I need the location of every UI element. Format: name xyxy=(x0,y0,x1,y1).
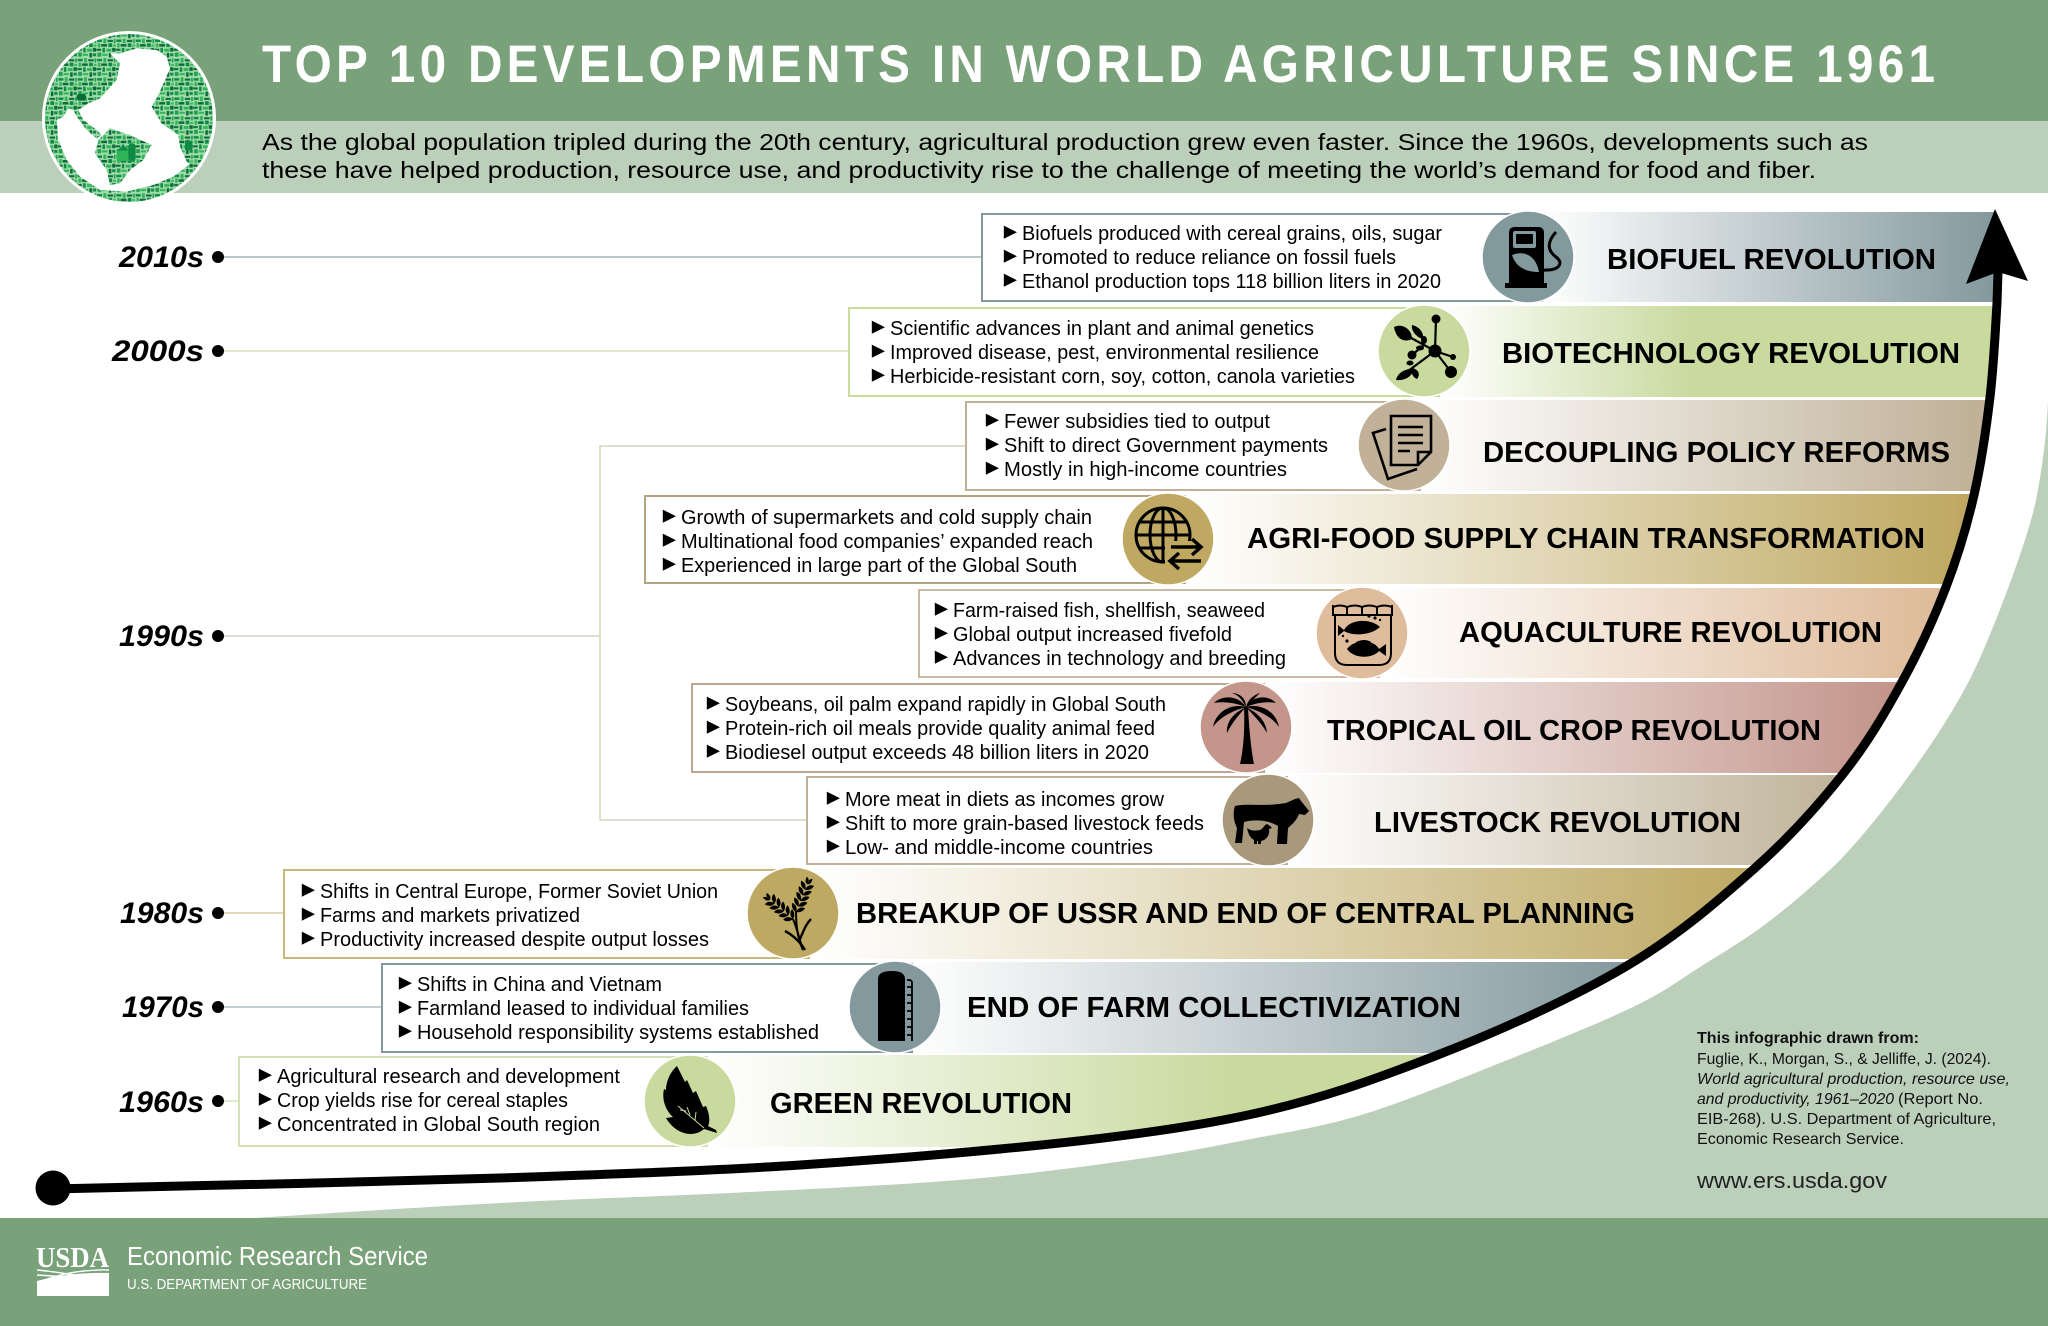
icon: fish tank xyxy=(1316,587,1408,679)
title: TOP 10 DEVELOPMENTS IN WORLD AGRICULTURE SINCE 1961 xyxy=(262,34,1935,94)
timeline connector lines xyxy=(224,257,981,1101)
band: green revolution: ► xyxy=(254,1109,276,1134)
intro text xyxy=(262,129,1868,183)
band: livestock revolution: More meat in diets as incomes grow xyxy=(845,789,1165,811)
USDA logo: USDA xyxy=(36,1242,109,1274)
icon: globe made of farm icons xyxy=(42,31,216,205)
band: decoupling policy reforms: Mostly in high-income countries xyxy=(1004,459,1287,481)
source citation: Economic Research Service. xyxy=(1697,1131,1904,1148)
band: livestock revolution xyxy=(807,775,1908,865)
band: biotechnology revolution: BIOTECHNOLOGY REVOLUTION xyxy=(1502,338,1960,370)
band: end of farm collectivization: ► xyxy=(394,993,416,1018)
icon: biotechnology network xyxy=(1378,305,1470,397)
band: aquaculture revolution xyxy=(919,588,1982,678)
band: aquaculture revolution: Advances in technology and breeding xyxy=(953,648,1286,670)
year label 1970s: 1970s xyxy=(122,991,204,1024)
band: decoupling policy reforms: ► xyxy=(982,454,1003,479)
band: biofuel revolution: Biofuels produced with cereal grains, oils, sugar xyxy=(1022,223,1442,245)
band: end of farm collectivization: ► xyxy=(394,1017,416,1042)
band: breakup of USSR: BREAKUP OF USSR AND END OF CENTRAL PLANNING xyxy=(856,898,1635,930)
source citation: Fuglie, K., Morgan, S., & Jelliffe, J. (2024). xyxy=(1697,1051,1991,1068)
growth arrow curve xyxy=(36,209,2028,1206)
footer agency name: Economic Research Service xyxy=(127,1243,428,1271)
band: decoupling policy reforms: Fewer subsidies tied to output xyxy=(1004,411,1270,433)
band: livestock revolution: LIVESTOCK REVOLUTION xyxy=(1374,807,1741,839)
band: green revolution: Crop yields rise for cereal staples xyxy=(277,1090,568,1112)
header title bar xyxy=(0,0,2048,121)
band: livestock revolution: Low- and middle-income countries xyxy=(845,837,1153,859)
band: biotechnology revolution: Herbicide-resistant corn, soy, cotton, canola varieties xyxy=(890,366,1355,388)
band: green revolution: Agricultural research and development xyxy=(277,1066,620,1088)
icon: cow and chicken xyxy=(1222,774,1314,866)
footer bar xyxy=(0,1218,2048,1326)
band: tropical oil crop revolution: Biodiesel output exceeds 48 billion liters in 2020 xyxy=(725,742,1149,764)
band: tropical oil crop revolution: ► xyxy=(702,737,724,762)
band: breakup of USSR xyxy=(284,868,1793,959)
icon: silo xyxy=(849,961,941,1053)
band: end of farm collectivization: Farmland leased to individual families xyxy=(417,998,749,1020)
source citation: and productivity, 1961–2020 xyxy=(1697,1091,1894,1108)
band: green revolution: ► xyxy=(254,1085,276,1110)
band: breakup of USSR: ► xyxy=(298,924,319,949)
header intro band xyxy=(0,121,2048,193)
band: agri-food supply chain transformation xyxy=(645,494,2008,584)
band: breakup of USSR: ► xyxy=(298,900,319,925)
band: decoupling policy reforms: DECOUPLING POLICY REFORMS xyxy=(1483,437,1950,469)
band: green revolution: GREEN REVOLUTION xyxy=(770,1088,1072,1120)
source citation: World agricultural production, resource use, xyxy=(1697,1071,2010,1088)
source citation: (Report No. xyxy=(1898,1091,1983,1108)
band: agri-food supply chain transformation: ► xyxy=(658,526,680,551)
band: agri-food supply chain transformation: AGRI-FOOD SUPPLY CHAIN TRANSFORMATION xyxy=(1247,523,1925,555)
year label 1980s: 1980s xyxy=(120,897,204,930)
band: agri-food supply chain transformation: Growth of supermarkets and cold supply chain xyxy=(681,507,1092,529)
band: biofuel revolution: BIOFUEL REVOLUTION xyxy=(1607,244,1936,276)
footer department name: U.S. DEPARTMENT OF AGRICULTURE xyxy=(127,1276,367,1293)
band: agri-food supply chain transformation: Multinational food companies’ expanded reach xyxy=(681,531,1093,553)
band: biotechnology revolution: ► xyxy=(868,313,889,338)
website: www.ers.usda.gov xyxy=(1696,1168,1887,1193)
band: biotechnology revolution: ► xyxy=(868,361,889,386)
band: biofuel revolution: Ethanol production tops 118 billion liters in 2020 xyxy=(1022,271,1441,293)
band: decoupling policy reforms: Shift to direct Government payments xyxy=(1004,435,1328,457)
band: tropical oil crop revolution: Protein-rich oil meals provide quality animal feed xyxy=(725,718,1155,740)
band: agri-food supply chain transformation: Experienced in large part of the Global South xyxy=(681,555,1077,577)
band: breakup of USSR: Shifts in Central Europe, Former Soviet Union xyxy=(320,881,718,903)
icon: wheat xyxy=(747,867,839,959)
band: biofuel revolution: ► xyxy=(1000,266,1021,291)
icon: palm tree xyxy=(1200,681,1292,773)
band: decoupling policy reforms: ► xyxy=(982,406,1003,431)
USDA logo xyxy=(36,1242,109,1296)
band: green revolution: ► xyxy=(254,1061,276,1086)
band: biotechnology revolution xyxy=(849,306,2004,397)
band: tropical oil crop revolution xyxy=(692,682,1946,773)
band: end of farm collectivization: Shifts in China and Vietnam xyxy=(417,974,662,996)
band: livestock revolution: ► xyxy=(822,808,844,833)
intro text: As the global population tripled during the 20th century, agricultural production grew even faster. Since the 1960s, developments such as xyxy=(262,129,1868,155)
band: tropical oil crop revolution: Soybeans, oil palm expand rapidly in Global South xyxy=(725,694,1166,716)
year label 1990s: 1990s xyxy=(119,620,204,653)
source citation: This infographic drawn from: xyxy=(1697,1030,1919,1047)
band: tropical oil crop revolution: TROPICAL OIL CROP REVOLUTION xyxy=(1327,715,1821,747)
band: green revolution xyxy=(239,1055,1490,1147)
year label 2000s: 2000s xyxy=(111,335,204,368)
icon: leaf xyxy=(644,1055,736,1147)
year label 1960s: 1960s xyxy=(119,1086,204,1119)
band: aquaculture revolution: AQUACULTURE REVOLUTION xyxy=(1459,617,1882,649)
band: tropical oil crop revolution: ► xyxy=(702,713,724,738)
band: agri-food supply chain transformation: ► xyxy=(658,550,680,575)
year label 2010s: 2010s xyxy=(118,241,204,274)
band: decoupling policy reforms: ► xyxy=(982,430,1003,455)
band: aquaculture revolution: ► xyxy=(930,643,952,668)
band: biotechnology revolution: Scientific advances in plant and animal genetics xyxy=(890,318,1314,340)
band: end of farm collectivization xyxy=(382,962,1695,1053)
icon: policy documents xyxy=(1358,399,1450,491)
band: decoupling policy reforms xyxy=(966,400,2004,491)
band: biofuel revolution: ► xyxy=(1000,242,1021,267)
band: biotechnology revolution: Improved disease, pest, environmental resilience xyxy=(890,342,1319,364)
band: biofuel revolution xyxy=(982,212,1994,302)
intro text: these have helped production, resource use, and productivity rise to the challenge of meeting the world’s demand for food and fiber. xyxy=(262,157,1816,183)
band: tropical oil crop revolution: ► xyxy=(702,689,724,714)
source citation: EIB-268). U.S. Department of Agriculture, xyxy=(1697,1111,1996,1128)
band: end of farm collectivization: ► xyxy=(394,969,416,994)
white area under the growth curve xyxy=(52,272,2048,1218)
band: aquaculture revolution: Farm-raised fish, shellfish, seaweed xyxy=(953,600,1265,622)
band: end of farm collectivization: END OF FARM COLLECTIVIZATION xyxy=(967,992,1461,1024)
icon: fuel pump xyxy=(1482,211,1574,303)
band: biofuel revolution: Promoted to reduce reliance on fossil fuels xyxy=(1022,247,1396,269)
band: aquaculture revolution: Global output increased fivefold xyxy=(953,624,1232,646)
band: breakup of USSR: Farms and markets privatized xyxy=(320,905,580,927)
band: livestock revolution: ► xyxy=(822,832,844,857)
band: livestock revolution: Shift to more grain-based livestock feeds xyxy=(845,813,1204,835)
light green area right of the curve xyxy=(240,400,2048,1219)
band: aquaculture revolution: ► xyxy=(930,619,952,644)
band: breakup of USSR: ► xyxy=(298,876,319,901)
band: biofuel revolution: ► xyxy=(1000,218,1021,243)
band: agri-food supply chain transformation: ► xyxy=(658,502,680,527)
band: aquaculture revolution: ► xyxy=(930,595,952,620)
band: end of farm collectivization: Household responsibility systems established xyxy=(417,1022,819,1044)
band: green revolution: Concentrated in Global South region xyxy=(277,1114,600,1136)
band: biotechnology revolution: ► xyxy=(868,337,889,362)
source citation xyxy=(1697,1030,2010,1148)
band: breakup of USSR: Productivity increased despite output losses xyxy=(320,929,709,951)
icon: globe with exchange arrows xyxy=(1122,493,1214,585)
band: livestock revolution: ► xyxy=(822,784,844,809)
